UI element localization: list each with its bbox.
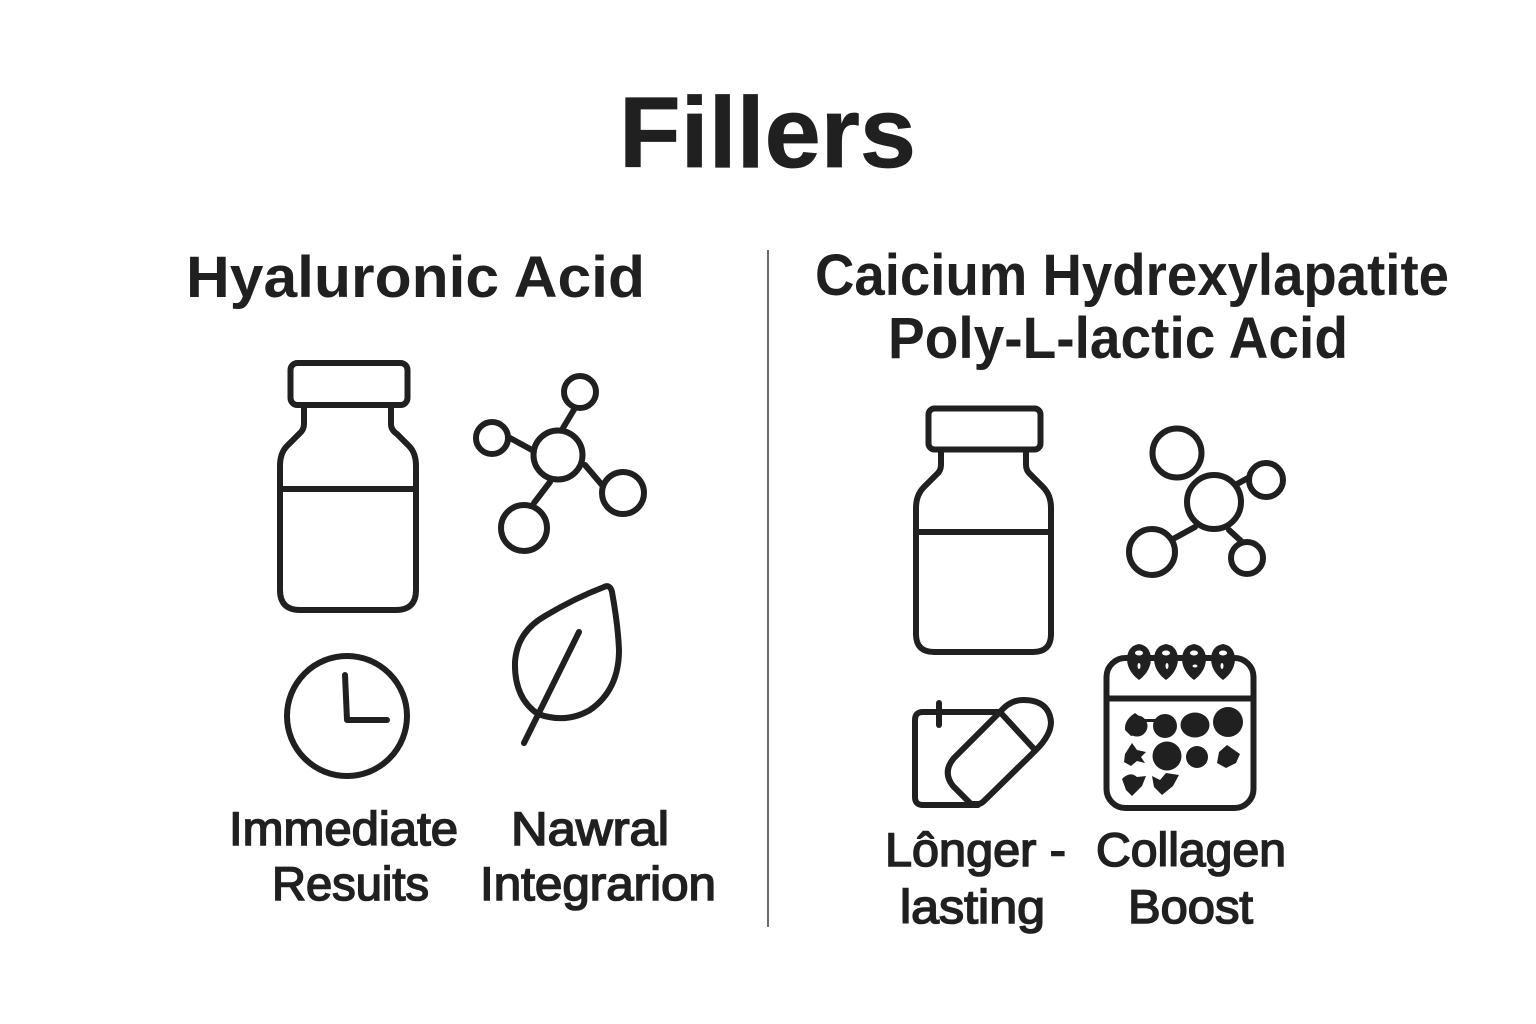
label: immediate results [229, 802, 458, 910]
panel: hyaluronic acid [186, 245, 716, 910]
panel: calcium hydroxylapatite and poly-l-lactic acid [815, 243, 1449, 933]
heading: calcium hydroxylapatite: Caicium Hydrexylapatite [815, 243, 1449, 308]
label: longer lasting [885, 823, 1066, 933]
label: immediate results: Immediate [229, 802, 458, 855]
icon: vial [916, 408, 1051, 652]
label: collagen boost: Boost [1128, 880, 1253, 933]
label: longer lasting: lasting [900, 880, 1045, 933]
label: collagen boost [1096, 823, 1286, 933]
icon: molecule [476, 376, 644, 551]
label: longer lasting: Lônger - [885, 823, 1066, 876]
icon: collagen calendar [1106, 644, 1254, 808]
icon: leaf [515, 586, 619, 743]
label: natural integration: Integrarion [480, 857, 716, 910]
icon: vial [280, 363, 416, 610]
icon: clock [287, 656, 407, 776]
label: natural integration: Nawral [511, 802, 669, 855]
heading: poly-l-lactic acid: Poly-L-lactic Acid [888, 306, 1348, 371]
icon: calendar with capsule [915, 700, 1051, 805]
label: collagen boost: Collagen [1096, 823, 1286, 876]
label: immediate results: Resuits [272, 857, 429, 910]
heading: hyaluronic acid: Hyaluronic Acid [186, 245, 645, 310]
label: natural integration [480, 802, 716, 910]
title: Fillers [619, 77, 916, 189]
icon: molecule [1129, 428, 1283, 575]
